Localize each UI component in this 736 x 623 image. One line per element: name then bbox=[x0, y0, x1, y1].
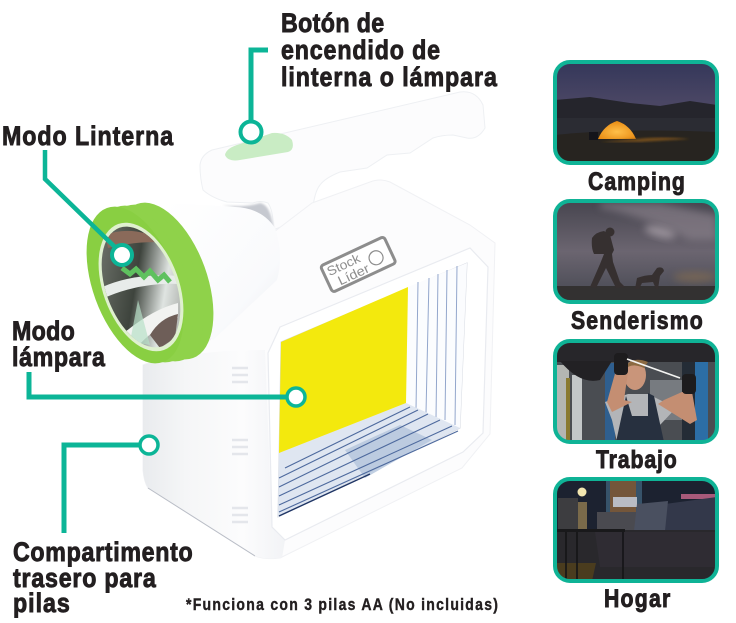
reflector bbox=[102, 226, 180, 348]
leader line: power button bbox=[240, 50, 268, 142]
panel: hogar bbox=[555, 479, 717, 612]
label: modo lampara bbox=[12, 316, 106, 372]
lamp opening with COB panel bbox=[278, 263, 467, 517]
hiker bbox=[590, 228, 625, 288]
power button bbox=[225, 133, 293, 160]
mechanic bbox=[605, 353, 697, 442]
panel: senderismo bbox=[555, 201, 717, 334]
photo: living room bbox=[555, 479, 717, 581]
photo: tent at night bbox=[555, 62, 717, 163]
label: boton de encendido: encendido de bbox=[281, 35, 440, 65]
leader line: compartimento bbox=[64, 436, 158, 533]
leader line: modo lampara bbox=[29, 372, 305, 406]
logo: Stock Líder bbox=[320, 237, 396, 292]
label: modo lampara: lámpara bbox=[12, 342, 106, 372]
panel: trabajo bbox=[555, 341, 717, 473]
label: compartimento trasero: pilas bbox=[13, 588, 70, 618]
label: compartimento trasero: trasero para bbox=[13, 563, 157, 593]
green ring bbox=[67, 190, 233, 376]
lantern body bbox=[143, 180, 495, 559]
caption: Senderismo bbox=[571, 306, 703, 334]
lantern handle bbox=[200, 92, 485, 235]
photo: mechanic bbox=[555, 341, 717, 442]
dog bbox=[636, 267, 664, 286]
bottom reflector bbox=[278, 403, 460, 517]
label: boton de encendido: Botón de bbox=[281, 8, 384, 38]
logo: Stock Líder: Stock bbox=[324, 250, 363, 279]
caption: Trabajo bbox=[596, 445, 677, 473]
label: boton de encendido: linterna o lámpara bbox=[281, 62, 498, 92]
panel: camping bbox=[555, 62, 717, 195]
caption: Camping bbox=[588, 167, 685, 195]
footnote: *Funciona con 3 pilas AA (No incluidas) bbox=[186, 596, 498, 614]
leader line: modo linterna bbox=[45, 150, 132, 265]
logo: Stock Líder: Líder bbox=[335, 260, 372, 288]
lamp head bbox=[86, 202, 276, 364]
yellow panel bbox=[279, 287, 408, 453]
photo: hiker and dog bbox=[555, 201, 717, 302]
label: boton de encendido bbox=[281, 8, 498, 92]
label: modo lampara: Modo bbox=[12, 316, 75, 346]
label: compartimento trasero bbox=[13, 537, 193, 618]
label: modo linterna: Modo Linterna bbox=[2, 121, 174, 151]
product: lantern bbox=[67, 92, 495, 559]
caption: Hogar bbox=[604, 584, 670, 612]
right reflector bbox=[406, 263, 467, 428]
label: compartimento trasero: Compartimento bbox=[13, 537, 193, 567]
